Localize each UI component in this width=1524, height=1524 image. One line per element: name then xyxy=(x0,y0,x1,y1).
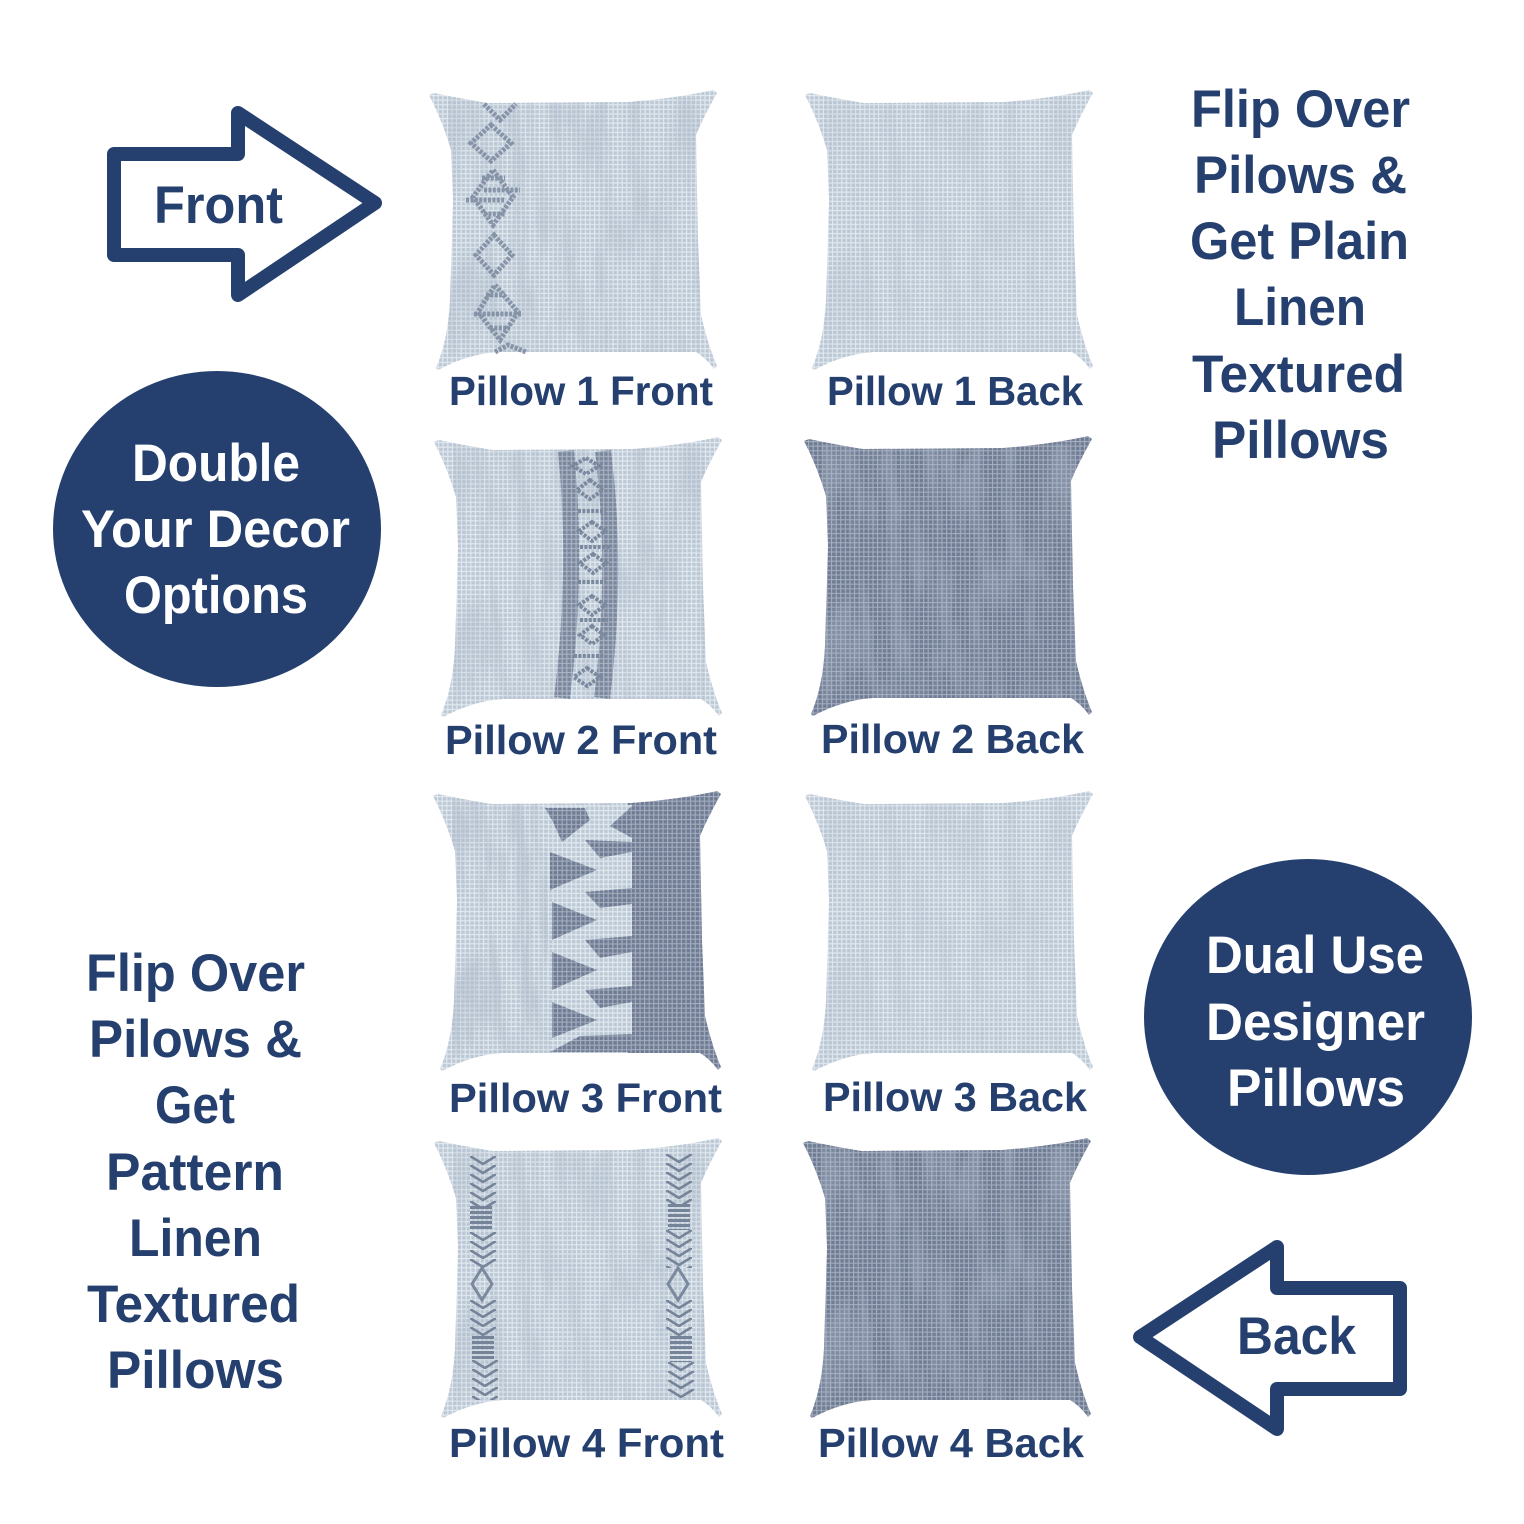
text block: flip over pattern: Textured xyxy=(87,1275,300,1334)
callout: dual use designer pillows xyxy=(1144,859,1472,1175)
text block: flip over pattern: Pattern xyxy=(106,1143,284,1202)
arrow: back: Back xyxy=(1237,1307,1356,1366)
arrow: front xyxy=(114,113,375,295)
label: pillow 3 back: Pillow 3 Back xyxy=(823,1074,1087,1120)
label: pillow 3 front: Pillow 3 Front xyxy=(449,1075,722,1121)
pattern: diamonds xyxy=(466,104,526,352)
text block: flip over pattern: Get xyxy=(155,1076,235,1135)
callout: dual use designer pillows: Pillows xyxy=(1227,1059,1405,1118)
callout: dual use designer pillows: Dual Use xyxy=(1206,926,1424,985)
pattern: ikat band xyxy=(545,805,632,1052)
arrow: front: Front xyxy=(154,176,283,235)
pattern: left border xyxy=(470,1156,498,1400)
callout: double your decor options xyxy=(53,371,381,687)
label: pillow 4 front: Pillow 4 Front xyxy=(449,1420,724,1466)
text block: flip over plain: Pilows & xyxy=(1194,146,1407,205)
pattern: central band xyxy=(562,451,610,698)
text block: flip over plain: Flip Over xyxy=(1191,80,1410,139)
callout: double your decor options: Double xyxy=(132,434,300,493)
label: pillow 2 front: Pillow 2 Front xyxy=(445,717,717,763)
text block: flip over pattern xyxy=(86,944,305,1400)
text block: flip over plain: Pillows xyxy=(1212,411,1389,470)
pillow 4 back xyxy=(802,1138,1094,1420)
label: pillow 1 front: Pillow 1 Front xyxy=(449,368,713,414)
text block: flip over plain: Get Plain xyxy=(1190,212,1409,271)
label: pillow 2 back: Pillow 2 Back xyxy=(821,716,1084,762)
text block: flip over pattern: Pilows & xyxy=(89,1010,302,1069)
pillow 1 front xyxy=(428,90,720,372)
text block: flip over plain xyxy=(1190,80,1410,470)
pillow 2 back xyxy=(803,436,1095,718)
pillow 1 back xyxy=(804,90,1096,372)
pillow 2 front xyxy=(433,437,725,719)
callout: double your decor options: Your Decor xyxy=(81,500,350,559)
label: pillow 1 back: Pillow 1 Back xyxy=(827,368,1083,414)
pillow 3 back xyxy=(804,791,1096,1073)
pillow 3 front xyxy=(432,791,724,1073)
pillow 4 front xyxy=(433,1138,725,1420)
text block: flip over pattern: Pillows xyxy=(107,1341,284,1400)
text block: flip over plain: Linen xyxy=(1234,278,1366,337)
text block: flip over pattern: Flip Over xyxy=(86,944,305,1003)
text block: flip over pattern: Linen xyxy=(129,1209,262,1268)
label: pillow 4 back: Pillow 4 Back xyxy=(818,1420,1084,1466)
callout: double your decor options: Options xyxy=(124,566,308,625)
pattern: right border xyxy=(666,1154,694,1398)
text block: flip over plain: Textured xyxy=(1192,345,1405,404)
callout: dual use designer pillows: Designer xyxy=(1206,993,1425,1052)
arrow: back xyxy=(1140,1247,1400,1429)
